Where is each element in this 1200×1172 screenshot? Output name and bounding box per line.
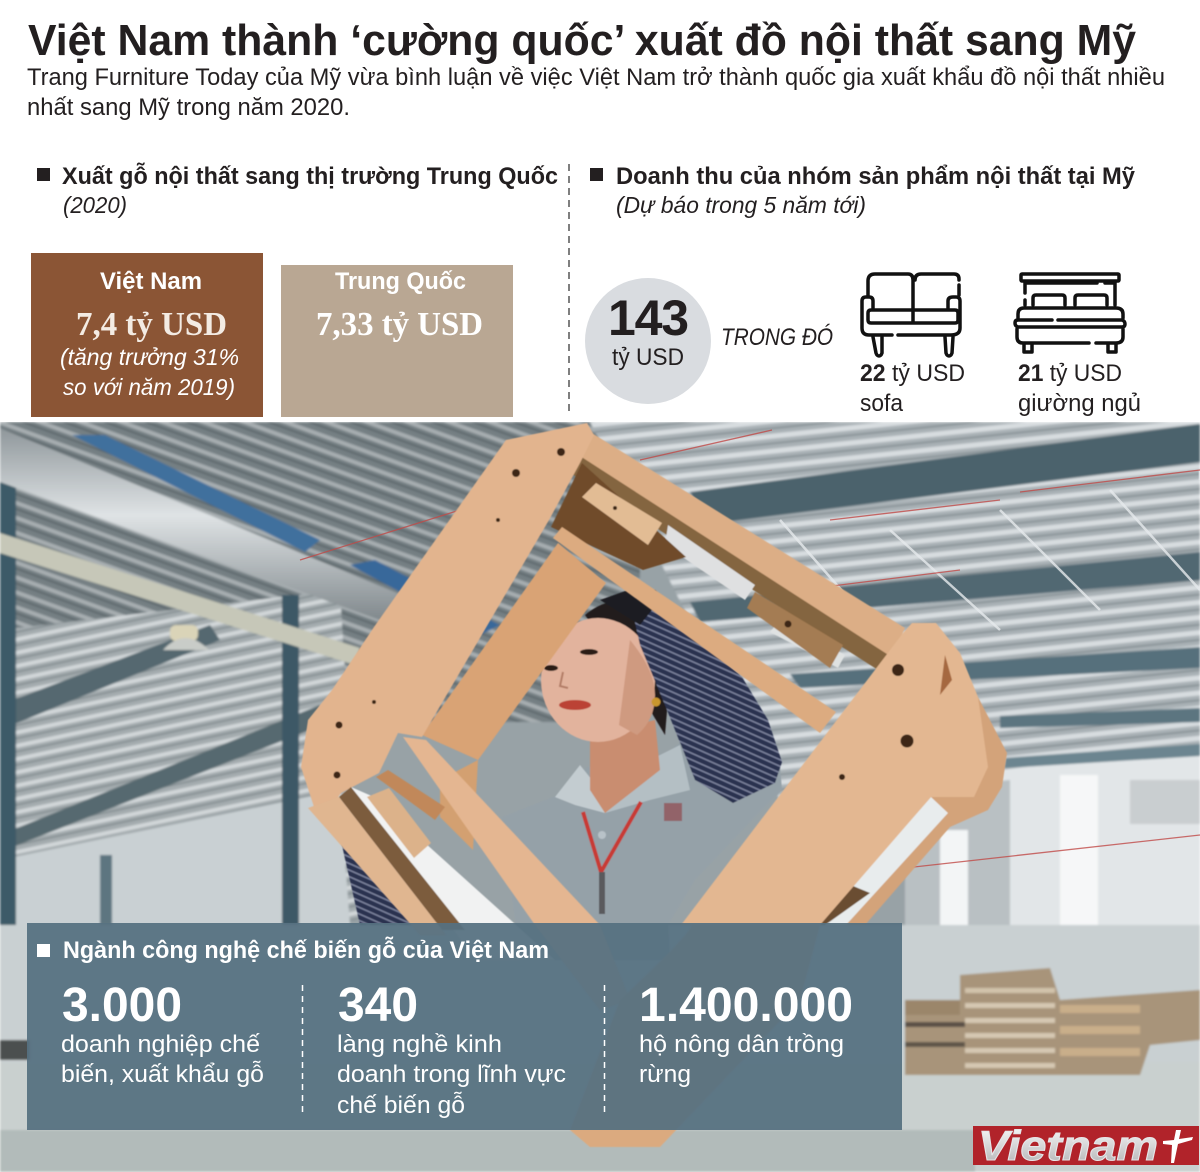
card: Vietnam [31,253,263,417]
card: Vietnam: (tăng trưởng 31% [60,344,239,370]
factory background [0,422,1200,1172]
neck [590,720,660,813]
icon: sofa [862,274,960,356]
heading: exports to China: Xuất gỗ nội thất sang thị trường Trung Quốc [62,162,558,190]
blue ceiling strip [72,435,320,552]
lumber stacks [905,968,1200,1075]
stat: 340 craft villages: 340 [338,979,418,1032]
photo: worker assembling wooden furniture frame in factory [0,422,1200,1172]
heading: exports to China: (2020) [63,192,127,218]
lower area [0,925,1200,1065]
worker [342,590,783,923]
heading: US furniture revenue: Doanh thu của nhóm sản phẩm nội thất tại Mỹ [616,163,1136,190]
panel: Vietnam wood-processing industry [27,923,902,1130]
card: Vietnam: so với năm 2019) [63,374,235,400]
panel: wood exports to China [31,162,558,417]
intro text: Trang Furniture Today của Mỹ vừa bình luận về việc Việt Nam trở thành quốc gia xuất khẩu đồ nội thất nhiều [27,64,1165,91]
panel: US furniture revenue [585,163,1141,417]
stat circle: 143 billion USD: 143 [608,290,689,346]
shirt [581,744,782,872]
lower-left dark strip [339,787,465,930]
stat: 340 craft villages: làng nghề kinh [337,1031,502,1058]
card: Vietnam: Việt Nam [100,268,202,295]
hair [585,601,670,735]
top right rail [577,430,905,660]
centre post [422,543,606,760]
title: Việt Nam thành ‘cường quốc’ xuất đồ nội thất sang Mỹ [28,16,1137,65]
label: of which: TRONG ĐÓ [721,324,833,351]
duct [0,428,402,622]
light block [582,483,662,545]
lower-left outer plank [308,796,438,924]
card: China: Trung Quốc [335,268,466,295]
intro text [27,64,1165,121]
stat: 1,400,000 farming households [639,979,853,1088]
frame below panel [570,925,820,1147]
stat: 3,000 enterprises [61,979,264,1088]
white strip [818,797,948,925]
heading: US furniture revenue [590,163,1136,218]
wooden frame [301,423,1007,1147]
label: bed value: 21 tỷ USD [1018,360,1122,387]
lower inner plank [403,736,599,923]
stat: 3,000 enterprises: doanh nghiệp chế [61,1031,261,1058]
label: sofa value: sofa [860,390,904,417]
heading: exports to China [37,162,558,218]
face [541,618,655,742]
label: sofa value [860,360,965,417]
stat: 340 craft villages: chế biến gỗ [337,1092,465,1119]
stat: 3,000 enterprises: biến, xuất khẩu gỗ [61,1061,264,1088]
diagonal brace [553,527,836,733]
sleeve [630,590,782,803]
intro text: nhất sang Mỹ trong năm 2020. [27,94,350,121]
lower-left white panel [351,787,555,960]
stat: 1,400,000 farming households: hộ nông dân trồng [639,1031,844,1058]
right post outer layer [835,697,1007,925]
card: China [281,265,513,417]
dark block [551,463,686,570]
stat: 340 craft villages [337,979,566,1119]
small post under centre [440,760,478,850]
label: sofa value: 22 tỷ USD [860,360,965,387]
small blocks [376,770,445,820]
stat circle: 143 billion USD: tỷ USD [612,344,684,371]
logo: Vietnam+: Vietnam [978,1122,1158,1169]
lower left sleeve [342,846,410,923]
heading: US furniture revenue: (Dự báo trong 5 năm tới) [616,192,866,218]
stat: 3,000 enterprises: 3.000 [62,979,182,1032]
stat: 1,400,000 farming households: 1.400.000 [639,979,853,1032]
stat: 340 craft villages: doanh trong lĩnh vực [337,1061,566,1088]
label: bed value [1018,360,1141,417]
stat circle: 143 billion USD [585,278,711,404]
stat: 1,400,000 farming households: rừng [639,1061,691,1088]
steel beams [690,424,1200,524]
left rail [301,423,594,813]
card: Vietnam: 7,4 tỷ USD [76,306,227,343]
panel heading: Ngành công nghệ chế biến gỗ của Việt Nam [63,936,549,964]
holes [334,448,914,780]
right post [681,623,988,925]
lanyard [583,802,641,872]
card: China: 7,33 tỷ USD [316,306,483,343]
label: bed value: giường ngủ [1018,390,1141,417]
icon: bed [1015,274,1125,352]
